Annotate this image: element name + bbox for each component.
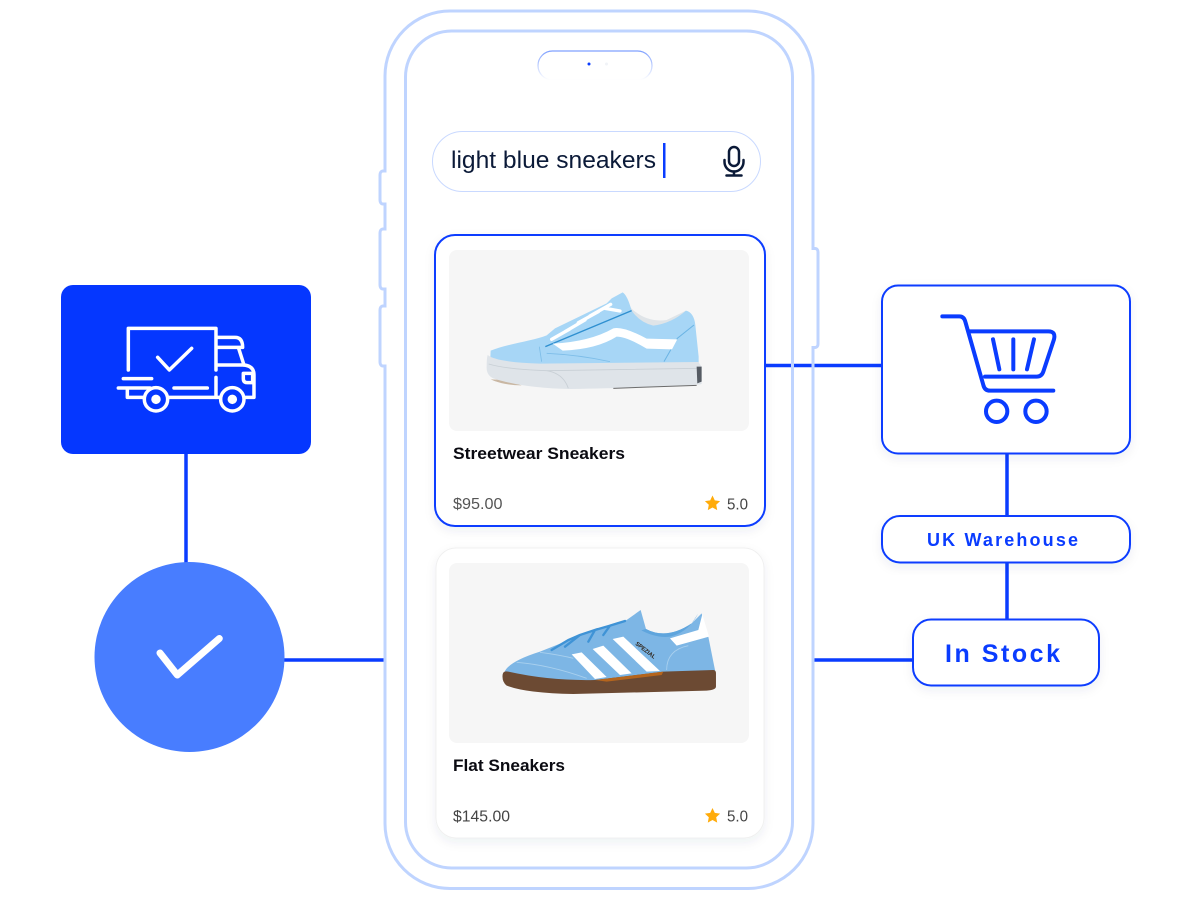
product card: Flat Sneakers: [436, 548, 764, 838]
label: UK Warehouse: [882, 516, 1130, 562]
rating: [705, 496, 748, 514]
search bar: [432, 132, 760, 192]
icon: microphone: [724, 147, 744, 176]
rating: 5.0: [727, 808, 748, 826]
shoe image: blue suede trainer: SPEZIAL: [634, 641, 657, 661]
price: $145.00: [453, 808, 510, 826]
icon: truck with check: [118, 328, 254, 411]
shoe image: light blue low-top: [487, 292, 702, 389]
panel: shopping cart: [882, 286, 1130, 454]
phone outline: [380, 11, 818, 888]
search bar: light blue sneakers: [451, 147, 656, 174]
label: In Stock: In Stock: [945, 640, 1060, 668]
icon: cart: [942, 316, 1054, 422]
check circle: [94, 562, 284, 752]
product name: Streetwear Sneakers: [453, 444, 625, 463]
rating: [705, 808, 748, 826]
panel: delivery truck: [61, 285, 311, 454]
phone notch: [538, 51, 652, 80]
rating: 5.0: [727, 496, 748, 514]
connector lines: [186, 366, 1007, 660]
shoe image: blue suede trainer: [502, 610, 716, 694]
label: In Stock: [913, 620, 1099, 686]
product card: Streetwear Sneakers: [435, 235, 765, 526]
price: $95.00: [453, 496, 503, 513]
label: UK Warehouse: UK Warehouse: [927, 530, 1078, 550]
product name: Flat Sneakers: [453, 756, 565, 775]
icon: check mark: [160, 638, 219, 675]
